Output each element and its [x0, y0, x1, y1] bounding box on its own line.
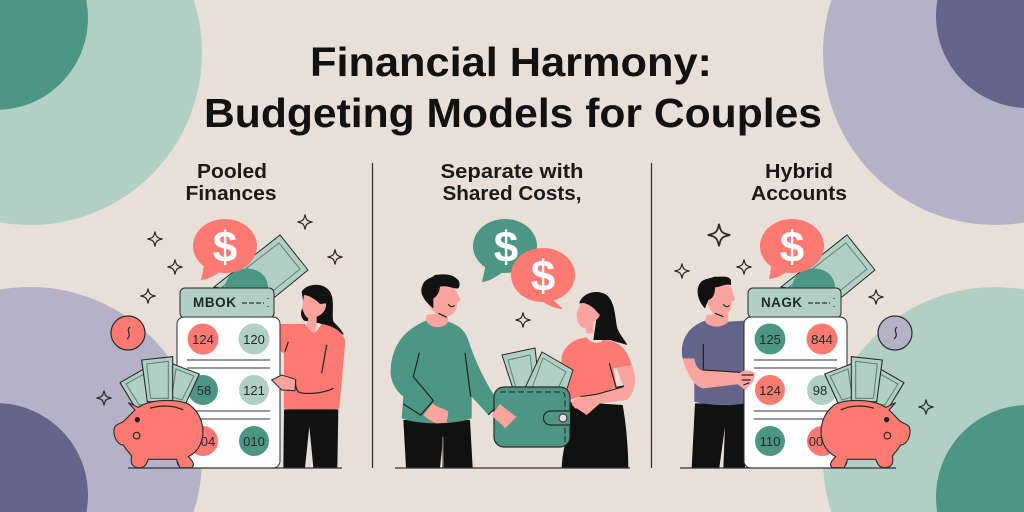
sparkles — [96, 214, 342, 406]
budget card: 98 — [813, 383, 827, 398]
icon: coin — [878, 316, 912, 350]
sparkle — [516, 312, 530, 328]
corner: top left circles — [0, 0, 202, 225]
icon: bill entering jar — [781, 235, 875, 297]
card header — [180, 288, 274, 318]
card header: MBOK — [193, 295, 236, 310]
woman hand — [272, 375, 296, 391]
panel: pooled finances illustration — [96, 214, 345, 468]
heading: pooled finances: Finances — [186, 182, 276, 205]
budget card — [744, 317, 847, 468]
heading: hybrid accounts: Accounts — [751, 182, 847, 205]
icon: coral dollar bubble — [511, 248, 575, 309]
icon: wallet — [494, 387, 570, 447]
budget card: 58 — [197, 383, 211, 398]
card header — [748, 288, 841, 318]
ground — [395, 467, 630, 469]
card header: NAGK — [761, 295, 802, 310]
corner: bottom right circles — [823, 287, 1024, 512]
man hand on wallet — [492, 404, 517, 428]
ground — [680, 467, 896, 469]
heading: separate with shared costs: Separate with — [440, 160, 584, 183]
budget card: 121 — [243, 383, 265, 398]
title — [204, 39, 822, 136]
budget card: 04 — [201, 434, 215, 449]
icon: piggy bank — [821, 357, 910, 468]
icon: bills in wallet — [502, 348, 573, 392]
budget card: 010 — [243, 434, 265, 449]
heading: pooled finances — [186, 160, 276, 205]
panel: separate with shared costs illustration — [391, 219, 635, 468]
woman — [278, 285, 345, 468]
budget card: 120 — [243, 332, 265, 347]
budget card: 125 — [759, 332, 781, 347]
man — [682, 277, 745, 468]
heading: hybrid accounts — [751, 160, 847, 205]
budget card — [177, 317, 280, 468]
heading: separate with shared costs — [440, 160, 584, 205]
budget card: 124 — [192, 332, 214, 347]
budget card: 844 — [811, 332, 833, 347]
ground — [128, 467, 342, 469]
icon: dollar speech bubble — [760, 219, 824, 279]
man — [391, 274, 500, 468]
budget card: 110 — [760, 434, 780, 449]
corner: bottom left circles — [0, 287, 202, 512]
heading: pooled finances: Pooled — [197, 160, 267, 183]
icon: green dollar bubble: $ — [494, 223, 518, 272]
icon: coin — [111, 316, 145, 350]
icon: dollar speech bubble: $ — [780, 223, 804, 272]
panel: hybrid accounts illustration — [674, 219, 934, 468]
title: Financial Harmony: — [310, 39, 712, 85]
icon: bill entering jar — [214, 235, 308, 297]
icon: dollar speech bubble — [193, 219, 257, 280]
woman hand on wallet — [571, 397, 597, 415]
heading: separate with shared costs: Shared Costs, — [442, 182, 582, 205]
budget card: 124 — [759, 383, 781, 398]
budget card: 00 — [809, 434, 823, 449]
heading: hybrid accounts: Hybrid — [765, 160, 833, 183]
dividers — [372, 163, 652, 468]
icon: dollar speech bubble: $ — [213, 223, 237, 272]
title: Budgeting Models for Couples — [204, 90, 822, 136]
icon: coral dollar bubble: $ — [531, 252, 555, 301]
corner: top right circles — [823, 0, 1024, 225]
man hand — [737, 370, 755, 390]
icon: piggy bank — [114, 357, 203, 468]
sparkles — [674, 224, 934, 414]
icon: green dollar bubble — [473, 219, 537, 282]
woman — [561, 292, 635, 468]
